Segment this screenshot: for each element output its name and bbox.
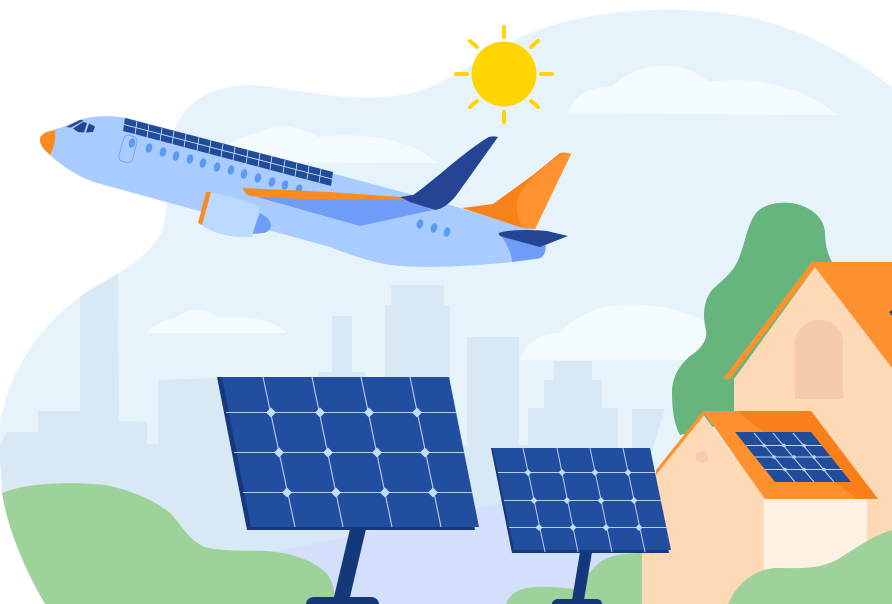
cloud: behind tree xyxy=(520,304,715,360)
large panel nodes xyxy=(266,408,438,498)
arched window xyxy=(795,320,843,399)
small panel nodes xyxy=(524,469,642,531)
city skyline xyxy=(0,273,665,552)
roof panel edge xyxy=(889,310,892,316)
green hill: centre xyxy=(506,553,642,604)
main house wall xyxy=(734,267,892,550)
roof solar panel xyxy=(735,432,851,482)
lower wall light section xyxy=(764,499,867,604)
large panel face xyxy=(222,377,479,527)
door xyxy=(118,134,138,164)
cloud: small left xyxy=(147,310,287,333)
lower house xyxy=(642,411,878,604)
large panel stand xyxy=(334,529,366,597)
small panel stand xyxy=(572,552,592,600)
fuselage solar strip xyxy=(123,118,333,186)
lower roof xyxy=(703,411,878,499)
wing leading edge xyxy=(243,188,410,200)
lower wall xyxy=(642,414,765,604)
cloud: top right xyxy=(568,66,837,115)
main roof xyxy=(723,262,892,379)
underwing shade xyxy=(257,197,433,226)
small panel grid xyxy=(498,448,667,552)
nose cone xyxy=(40,130,55,155)
main house xyxy=(723,262,892,550)
large panel frame xyxy=(217,377,475,530)
sun rays xyxy=(456,27,552,122)
small solar panel xyxy=(491,448,671,604)
tree xyxy=(672,203,840,435)
large panel grid xyxy=(226,377,472,527)
small panel base xyxy=(552,599,602,604)
fuselage xyxy=(49,116,547,267)
winglet xyxy=(400,136,498,210)
cockpit windows xyxy=(66,120,95,132)
green hill: left xyxy=(2,483,335,604)
sun xyxy=(456,27,552,122)
sun disc xyxy=(472,42,536,106)
wall vent xyxy=(696,451,708,463)
cloud: behind plane xyxy=(215,127,437,163)
large panel base xyxy=(306,597,379,604)
tail fin xyxy=(462,153,571,229)
engine intake ring xyxy=(198,192,211,225)
water / ground area xyxy=(262,480,650,604)
rear fuselage shade xyxy=(502,237,545,262)
roof edge xyxy=(656,411,705,475)
engine xyxy=(252,213,271,234)
large solar panel xyxy=(217,377,479,604)
small panel frame xyxy=(491,448,669,553)
green hill: right xyxy=(728,530,892,604)
small panel face xyxy=(493,448,671,550)
airplane xyxy=(40,116,571,267)
tail stabilizer xyxy=(499,230,568,247)
lower roof shade xyxy=(737,411,878,499)
passenger windows xyxy=(128,138,451,237)
